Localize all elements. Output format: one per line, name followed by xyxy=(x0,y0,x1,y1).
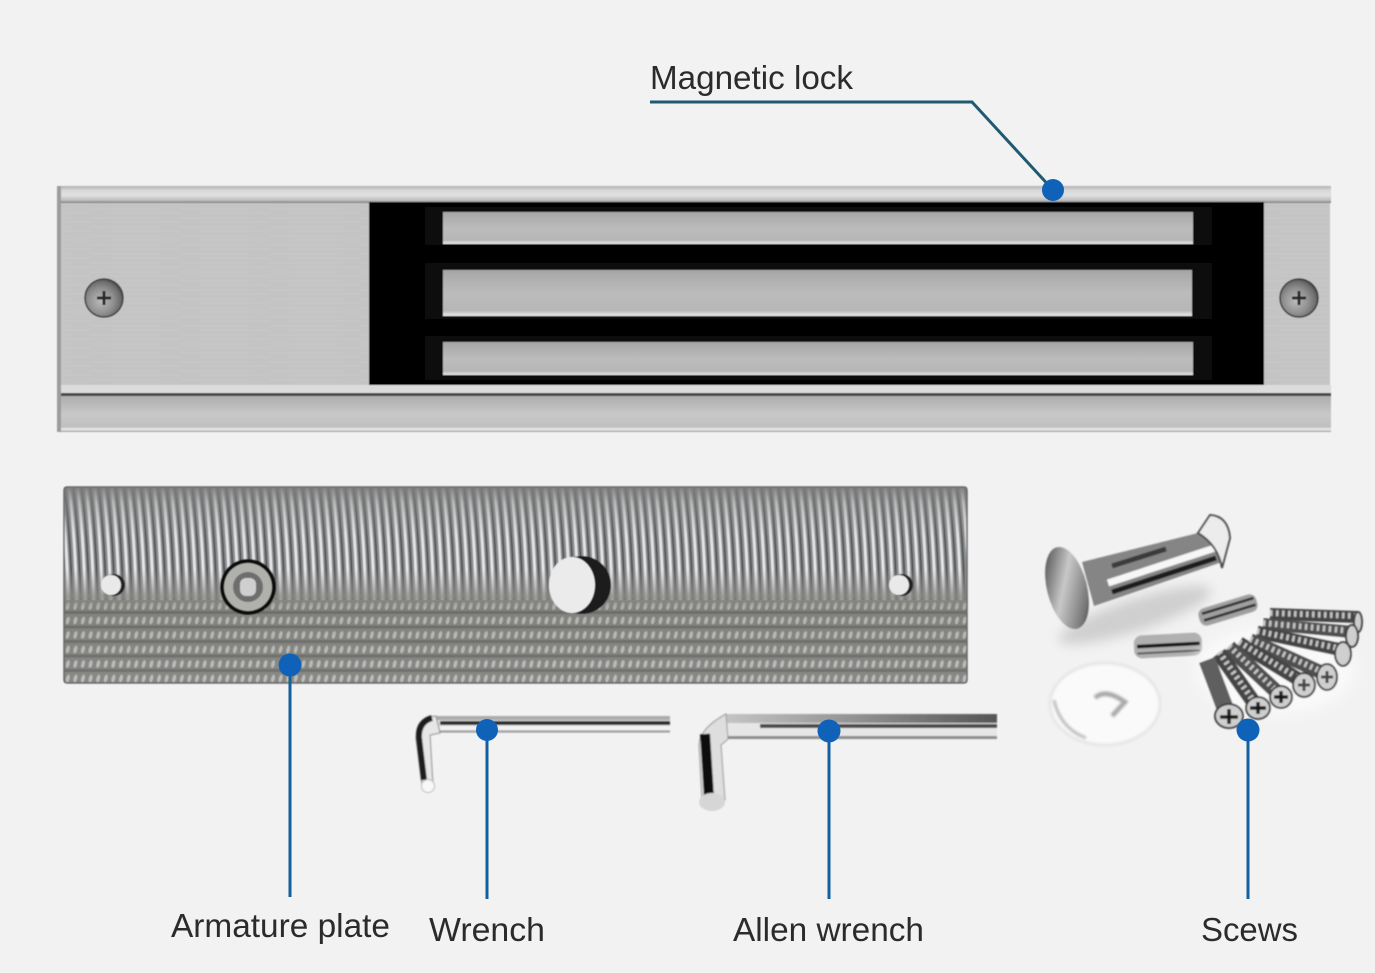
pin 2 xyxy=(1133,632,1203,659)
label: Scews: Scews xyxy=(1201,911,1298,948)
leader line xyxy=(486,730,488,899)
marker dot xyxy=(1042,179,1064,201)
shaft xyxy=(436,716,670,733)
leader line xyxy=(1246,730,1250,899)
soft shadow xyxy=(1054,575,1216,655)
magnet bar 2 xyxy=(443,270,1192,316)
pin 1 xyxy=(1197,593,1259,627)
magnet bar 3 xyxy=(443,342,1193,375)
black magnet core xyxy=(369,202,1264,385)
marker dot xyxy=(476,719,498,741)
label: Armature plate: Armature plate xyxy=(171,907,390,944)
label: Magnetic lock: Magnetic lock xyxy=(650,59,853,96)
marker dot xyxy=(278,654,302,676)
leader line xyxy=(650,102,1053,190)
right small hole xyxy=(889,574,913,596)
elbow and leg xyxy=(699,714,728,800)
label: Allen wrench: Allen wrench xyxy=(733,911,924,948)
callout: screws xyxy=(1201,718,1298,948)
wrench xyxy=(416,716,670,792)
magnetic lock body xyxy=(57,186,1331,432)
callout: magnetic lock xyxy=(650,59,1064,201)
inner core blocks xyxy=(425,207,1212,380)
elbow and leg xyxy=(416,716,440,785)
right mounting screw xyxy=(1280,279,1318,317)
marker dot xyxy=(1236,718,1260,742)
label: Wrench: Wrench xyxy=(429,911,545,948)
leader line xyxy=(288,665,292,897)
armature bolt xyxy=(220,559,276,615)
top rail xyxy=(57,186,1331,203)
centre hole xyxy=(549,556,611,614)
callout: allen wrench xyxy=(733,720,924,948)
lower rail xyxy=(57,385,1331,432)
magnet bar 1 xyxy=(443,212,1193,244)
plastic washer xyxy=(1050,663,1160,745)
allen wrench xyxy=(699,714,997,811)
left small hole xyxy=(101,574,125,596)
faceplate xyxy=(60,203,1330,385)
armature plate xyxy=(64,487,967,683)
wood screws fan xyxy=(1195,612,1362,728)
screws and hardware xyxy=(1037,515,1362,745)
shaft xyxy=(726,714,997,739)
left mounting screw xyxy=(85,279,123,317)
leader line xyxy=(828,731,830,899)
mounting bolt xyxy=(1037,515,1230,634)
callout: wrench xyxy=(429,719,545,948)
white halo xyxy=(1195,625,1355,715)
marker dot xyxy=(818,720,840,742)
callout: armature plate xyxy=(171,654,390,944)
